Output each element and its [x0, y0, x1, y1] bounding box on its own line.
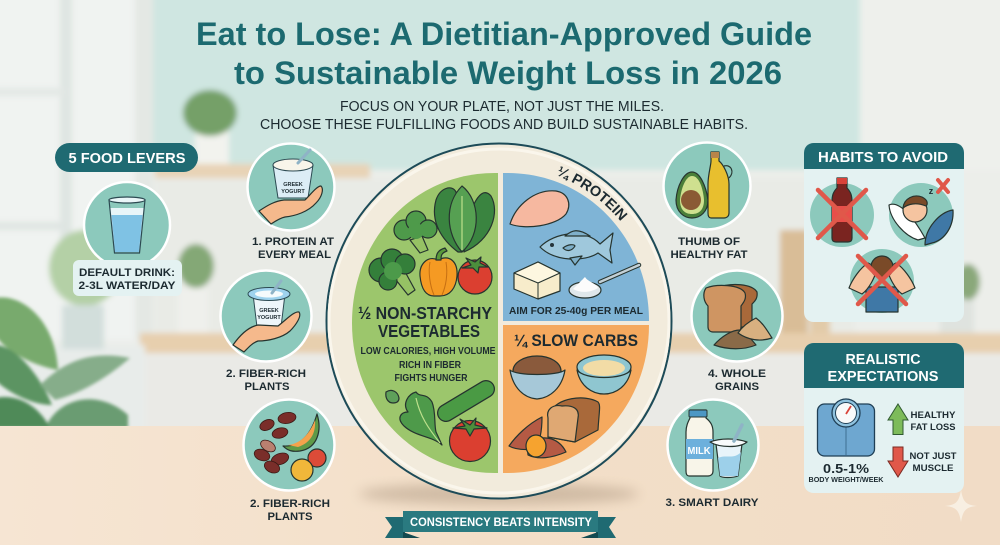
thumb of healthy fat	[664, 142, 750, 261]
bell pepper	[420, 248, 457, 296]
lever 2: fiber-rich plants, yogurt: 2. FIBER-RICH	[226, 368, 306, 380]
subtitle: CHOOSE THESE FULFILLING FOODS AND BUILD SUSTAINABLE HABITS.	[260, 117, 748, 133]
lever 1: protein at every meal: GREEK	[283, 182, 303, 188]
spinach	[434, 186, 495, 252]
lever 1: protein at every meal: 1. PROTEIN AT	[252, 236, 334, 248]
vegetables heading: VEGETABLES	[378, 321, 480, 341]
callout: default drink: 2-3L WATER/DAY	[78, 280, 176, 292]
title: Eat to Lose: A Dietitian-Approved Guide	[196, 16, 812, 52]
lever 1: protein at every meal: YOGURT	[281, 189, 305, 195]
title	[196, 16, 812, 91]
panel: realistic expectations	[804, 343, 964, 493]
arrow: up, healthy fat loss: HEALTHY	[910, 410, 956, 421]
cucumber	[446, 389, 486, 413]
4. whole grains: 4. WHOLE	[708, 368, 766, 380]
lettuce leaf	[400, 392, 442, 445]
heading: 5 food levers	[55, 143, 198, 172]
vegetables notes: FIGHTS HUNGER	[394, 373, 468, 384]
4. whole grains: GRAINS	[715, 381, 759, 393]
tofu	[514, 262, 560, 299]
realistic heading: EXPECTATIONS	[828, 369, 939, 385]
weight rate: 0.5-1%	[823, 461, 869, 476]
plate section: protein	[503, 166, 649, 321]
banner: consistency beats intensity: CONSISTENCY BEATS INTENSITY	[410, 517, 592, 529]
heading: 5 food levers: 5 FOOD LEVERS	[68, 151, 186, 167]
weight rate	[808, 461, 884, 484]
bread loaf	[548, 398, 600, 442]
arrow: up, healthy fat loss	[888, 404, 956, 434]
lever 1: protein at every meal	[248, 144, 334, 261]
plate section: vegetables	[352, 173, 498, 473]
vegetables notes	[360, 346, 496, 384]
chicken breast	[510, 191, 569, 227]
lever 2: fiber-rich plants, beans and fruit	[244, 400, 334, 523]
bowl of oats	[577, 355, 631, 394]
icon: sleep: z	[929, 186, 934, 196]
vegetables heading: ½ NON-STARCHY	[358, 303, 492, 323]
lever 2: fiber-rich plants, yogurt: YOGURT	[257, 315, 281, 321]
banner: consistency beats intensity	[385, 511, 616, 538]
3. smart dairy: MILK	[688, 446, 711, 457]
subtitle: FOCUS ON YOUR PLATE, NOT JUST THE MILES.	[340, 99, 664, 115]
icon: no soda	[810, 178, 874, 247]
lever 2: fiber-rich plants, beans and fruit: PLANTS	[268, 511, 312, 523]
arrow: up, healthy fat loss: FAT LOSS	[910, 422, 956, 433]
callout: default drink	[73, 260, 182, 296]
fish	[540, 231, 613, 265]
plate section: slow carbs	[503, 325, 649, 473]
icon: water glass	[84, 182, 170, 268]
protein curved label: ¼ PROTEIN	[558, 166, 628, 221]
lever 1: protein at every meal: EVERY MEAL	[258, 249, 331, 261]
small leaf	[386, 390, 399, 403]
lever 2: fiber-rich plants, yogurt: GREEK	[259, 308, 279, 314]
icon: scale	[818, 399, 874, 456]
panel: habits to avoid	[804, 143, 964, 322]
broccoli small	[394, 211, 437, 253]
3. smart dairy	[666, 400, 759, 509]
arrow: down, not just muscle: MUSCLE	[912, 463, 954, 474]
icon: sleep	[889, 180, 953, 247]
habits heading: HABITS TO AVOID	[818, 149, 948, 166]
plate	[326, 142, 672, 510]
lever 2: fiber-rich plants, yogurt: PLANTS	[244, 381, 290, 393]
tomato 2	[450, 418, 490, 462]
carbs heading: ¼ SLOW CARBS	[514, 331, 638, 350]
arrow: down, not just muscle	[888, 447, 957, 477]
bowl of lentils	[510, 356, 565, 399]
thumb of healthy fat: HEALTHY FAT	[670, 249, 748, 261]
realistic heading	[828, 352, 939, 385]
spoon	[569, 265, 639, 298]
weight rate: BODY WEIGHT/WEEK	[808, 477, 884, 484]
arrow: down, not just muscle: NOT JUST	[910, 451, 957, 462]
protein note: AIM FOR 25-40g PER MEAL	[509, 305, 644, 317]
thumb of healthy fat: THUMB OF	[678, 236, 740, 248]
callout: default drink: DEFAULT DRINK:	[79, 267, 175, 279]
realistic heading: REALISTIC	[846, 352, 921, 368]
lever 2: fiber-rich plants, beans and fruit: 2. FIBER-RICH	[250, 498, 330, 510]
sparkle star	[945, 490, 977, 522]
tomato	[458, 257, 492, 294]
sweet potato	[509, 417, 566, 458]
3. smart dairy: 3. SMART DAIRY	[666, 497, 759, 509]
4. whole grains	[692, 270, 782, 393]
title: to Sustainable Weight Loss in 2026	[234, 55, 782, 91]
vegetables notes: RICH IN FIBER	[399, 360, 462, 371]
icon: stress	[849, 249, 915, 313]
lever 2: fiber-rich plants, yogurt	[220, 270, 312, 393]
vegetables heading	[358, 303, 492, 341]
broccoli large	[369, 249, 415, 295]
vegetables notes: LOW CALORIES, HIGH VOLUME	[360, 346, 496, 357]
subtitle	[260, 99, 748, 133]
